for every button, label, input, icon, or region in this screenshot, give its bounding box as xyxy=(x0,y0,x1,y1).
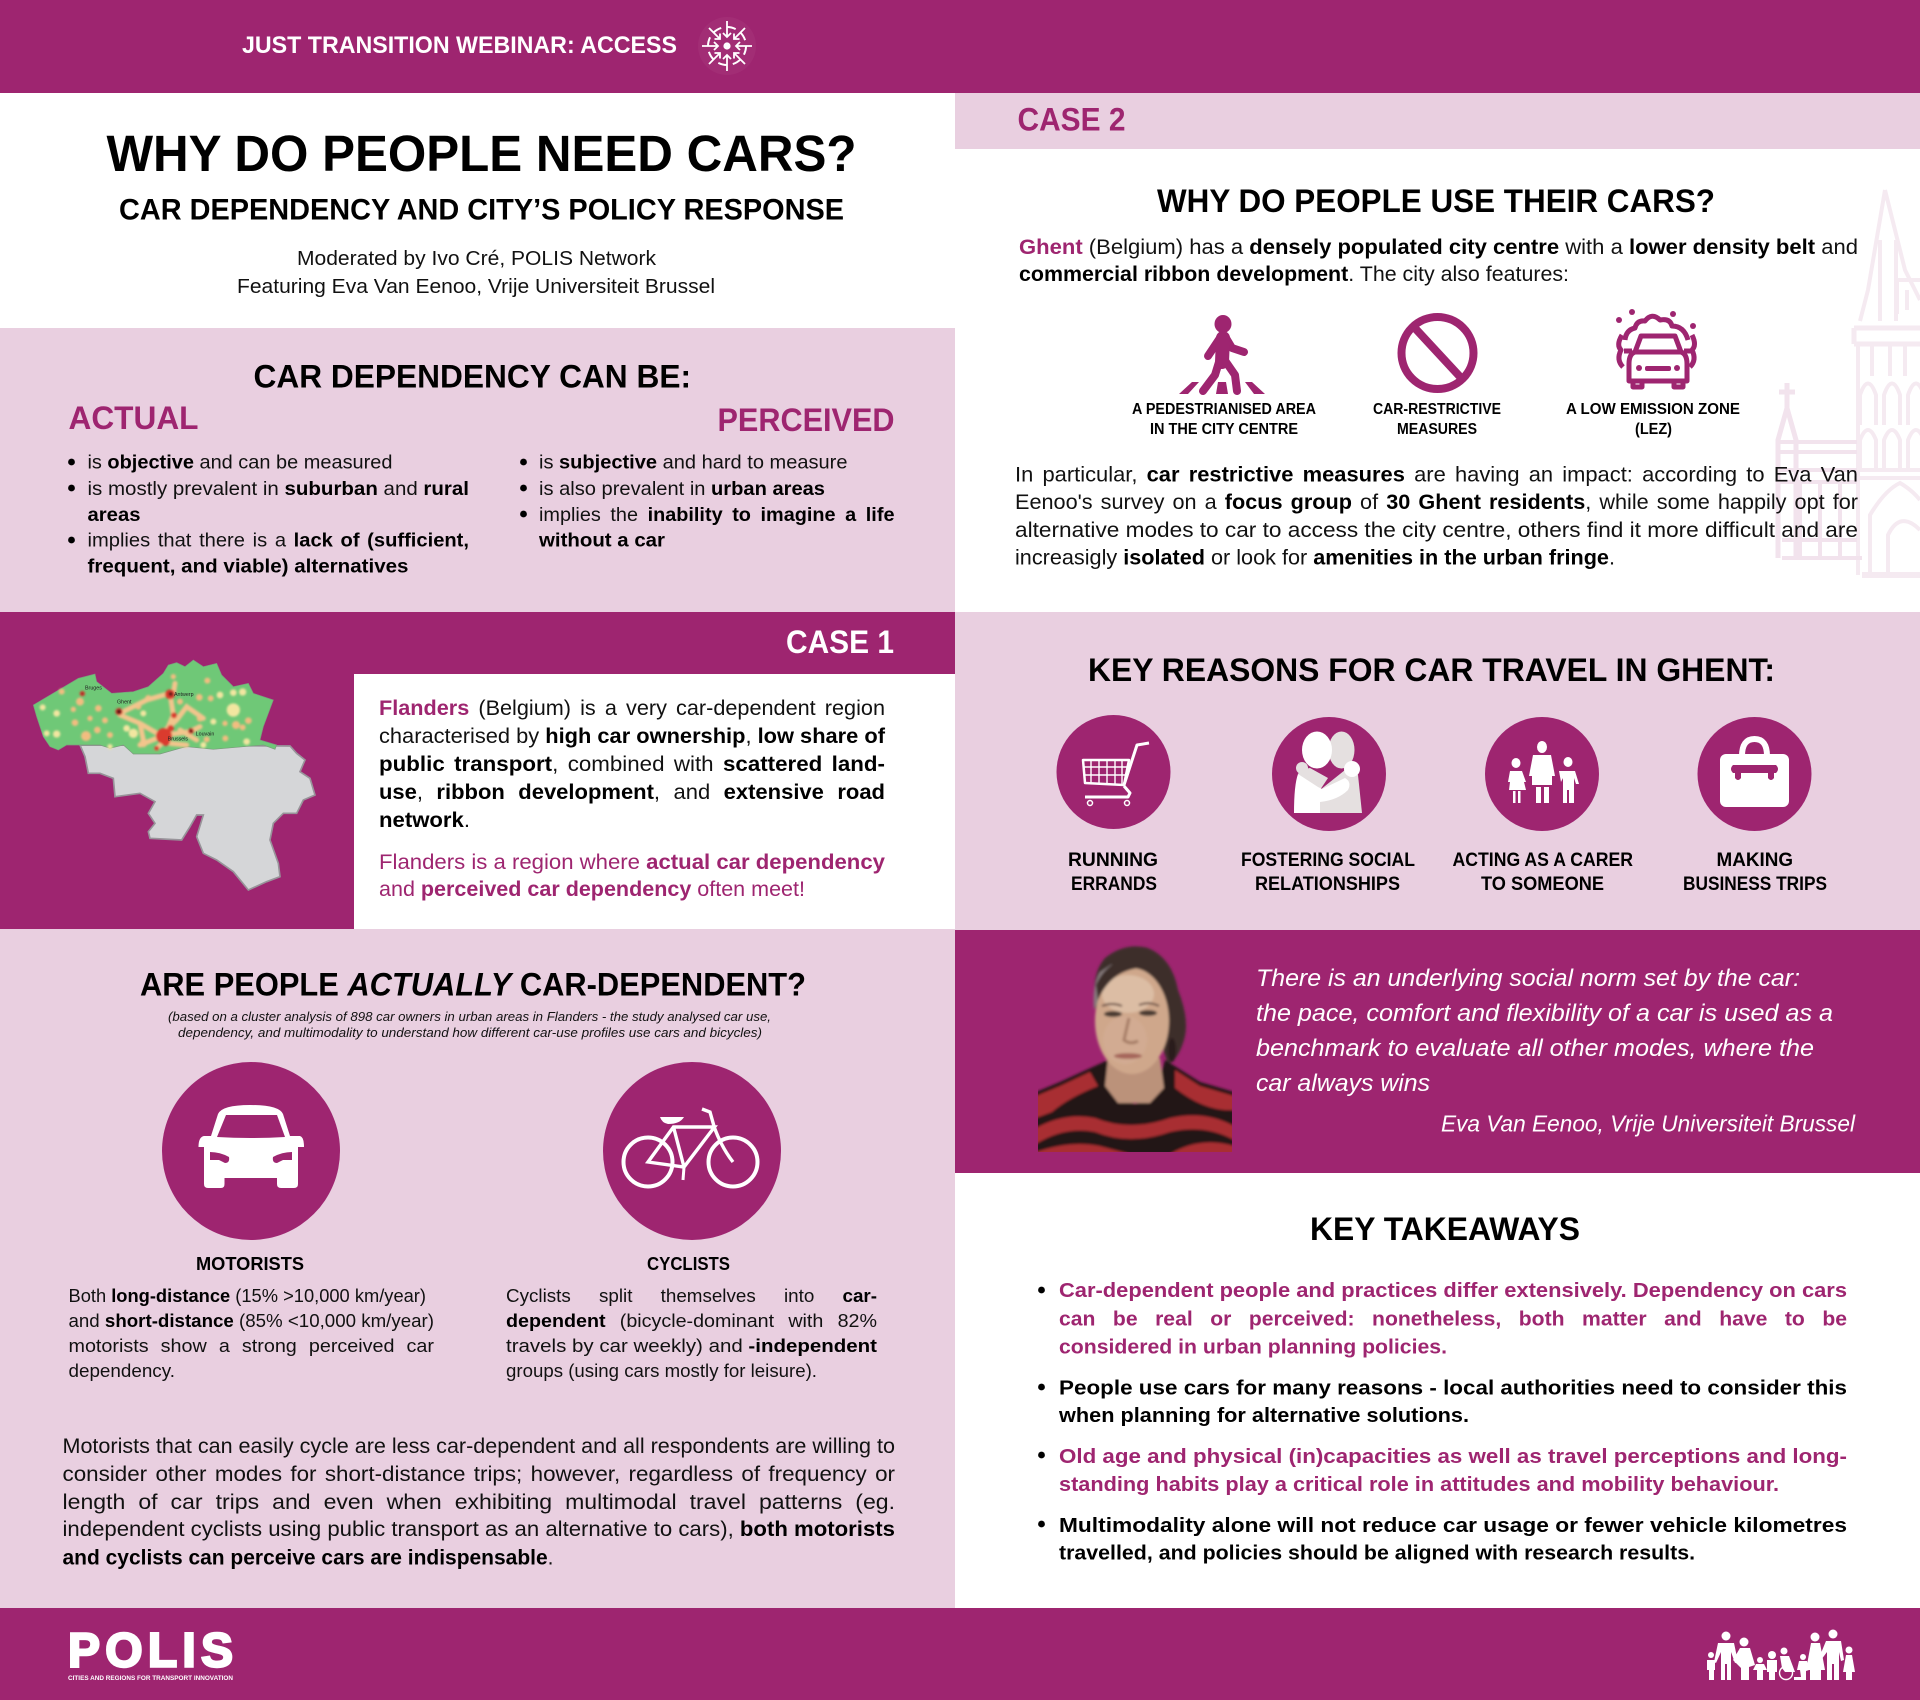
icon: low emission car xyxy=(1616,309,1696,387)
cyclists: Cyclists split themselves into car- xyxy=(506,1286,877,1306)
cyclists: travels by car weekly) and -independent xyxy=(506,1336,877,1356)
cyclists: dependent (bicycle-dominant with 82% xyxy=(506,1311,877,1331)
feature captions: A LOW EMISSION ZONE xyxy=(1566,401,1740,418)
icon: car in circle xyxy=(162,1062,340,1240)
Flanders highlight: Flanders is a region where actual car dependency xyxy=(379,851,885,874)
case 2 label: CASE 2 xyxy=(1018,102,1126,138)
conclusion paragraph xyxy=(62,1435,895,1570)
map of Belgium with Flanders heat map: Bruges xyxy=(85,685,102,691)
actual column: is mostly prevalent in suburban and rural xyxy=(88,478,469,500)
takeaway 3: Old age and physical (in)capacities as well as travel perceptions and long- xyxy=(1059,1446,1847,1468)
panel: car dependency types xyxy=(0,328,955,612)
motorists: Both long-distance (15% >10,000 km/year) xyxy=(68,1286,426,1306)
quote attribution: Eva Van Eenoo, Vrije Universiteit Brussel xyxy=(1441,1110,1856,1136)
conclusion paragraph: length of car trips and even when exhibiting multimodal travel patterns (eg. xyxy=(62,1491,895,1514)
reason captions: RUNNING xyxy=(1068,849,1158,871)
feature captions: MEASURES xyxy=(1397,421,1477,438)
cyclists: groups (using cars mostly for leisure). xyxy=(506,1361,817,1381)
perceived column: without a car xyxy=(538,530,665,552)
Flanders description: network. xyxy=(379,809,470,832)
icon: group of people xyxy=(1707,1630,1855,1680)
feature captions: A PEDESTRIANISED AREA xyxy=(1132,401,1316,418)
icon: no entry xyxy=(1402,317,1474,389)
map of Belgium with Flanders heat map: Ghent xyxy=(117,700,132,706)
cyclists: CYCLISTS xyxy=(647,1254,730,1274)
panel: quote xyxy=(955,930,1920,1173)
takeaway 2: People use cars for many reasons - local authorities need to consider this xyxy=(1059,1378,1847,1400)
cyclists xyxy=(506,1254,877,1381)
motorists: motorists show a strong perceived car xyxy=(68,1336,434,1356)
Flanders description: public transport , combined with scattered land- xyxy=(379,753,885,776)
takeaway 4: Multimodality alone will not reduce car usage or fewer vehicle kilometres xyxy=(1059,1515,1847,1537)
header title: JUST TRANSITION WEBINAR: ACCESS xyxy=(242,32,677,59)
perceived column: implies the inability to imagine a life xyxy=(539,504,895,526)
panel: key takeaways xyxy=(1038,1211,1847,1564)
reason captions: FOSTERING SOCIAL xyxy=(1241,849,1415,871)
actual column: ACTUAL xyxy=(68,400,198,436)
panel: case 2 Ghent xyxy=(955,93,1920,575)
panel: title block xyxy=(106,125,856,298)
footer banner xyxy=(0,1608,1920,1700)
heading: KEY REASONS FOR CAR TRAVEL IN GHENT: xyxy=(1088,652,1775,688)
heading: ARE PEOPLE ACTUALLY CAR-DEPENDENT? xyxy=(140,966,806,1002)
perceived column: is also prevalent in urban areas xyxy=(539,478,825,500)
quote text xyxy=(1256,965,1856,1136)
perceived column xyxy=(520,402,895,552)
perceived column: is subjective and hard to measure xyxy=(539,452,848,474)
header banner xyxy=(0,0,1920,93)
conclusion paragraph: and cyclists can perceive cars are indispensable. xyxy=(62,1546,554,1570)
actual column: frequent, and viable) alternatives xyxy=(88,556,409,578)
takeaway 1: can be real or perceived: nonetheless, both matter and have to be xyxy=(1059,1308,1847,1330)
POLIS logo: POLIS xyxy=(68,1624,233,1678)
panel: case 1 Flanders xyxy=(0,612,955,929)
map of Belgium with Flanders heat map: Louvain xyxy=(196,732,214,738)
motorists: MOTORISTS xyxy=(196,1254,304,1274)
Flanders highlight: and perceived car dependency often meet! xyxy=(379,878,805,901)
study note: (based on a cluster analysis of 898 car owners in urban areas in Flanders - the study analysed car use, xyxy=(168,1010,771,1024)
takeaway 1: considered in urban planning policies. xyxy=(1059,1336,1447,1358)
perceived column: PERCEIVED xyxy=(718,402,894,438)
icon: carer with children xyxy=(1485,717,1599,831)
subtitle: CAR DEPENDENCY AND CITY’S POLICY RESPONSE xyxy=(119,194,844,226)
map of Belgium with Flanders heat map: Brussels xyxy=(168,736,188,742)
icon: pedestrian crossing xyxy=(1179,315,1265,394)
Ghent intro: Ghent (Belgium) has a densely populated city centre with a lower density belt and xyxy=(1019,236,1858,259)
main title: WHY DO PEOPLE NEED CARS? xyxy=(106,125,856,182)
reason captions: ACTING AS A CARER xyxy=(1452,849,1633,871)
study note: dependency, and multimodality to understand how different car-use profiles use cars and bicycles) xyxy=(178,1026,762,1040)
feature captions: (LEZ) xyxy=(1635,421,1672,438)
conclusion paragraph: Motorists that can easily cycle are less car-dependent and all respondents are willing to xyxy=(62,1435,895,1458)
feature captions: CAR-RESTRICTIVE xyxy=(1373,401,1501,418)
car restrictive measures paragraph: increasigly isolated or look for amenities in the urban fringe . xyxy=(1015,546,1615,570)
takeaway 4 xyxy=(1038,1515,1847,1564)
actual column: implies that there is a lack of (sufficient, xyxy=(88,530,469,552)
quote text: There is an underlying social norm set by the car: xyxy=(1256,965,1800,992)
car restrictive measures paragraph xyxy=(1015,464,1858,570)
feature captions xyxy=(1132,401,1740,438)
church watermark xyxy=(1778,190,1920,575)
Flanders description xyxy=(379,697,886,832)
heading: KEY TAKEAWAYS xyxy=(1310,1211,1580,1247)
Ghent intro xyxy=(1019,236,1858,286)
speakers xyxy=(237,247,715,298)
panel: key reasons xyxy=(955,612,1920,930)
motorists: dependency. xyxy=(68,1361,175,1381)
motorists: and short-distance (85% <10,000 km/year) xyxy=(68,1311,434,1331)
takeaway 2: when planning for alternative solutions. xyxy=(1058,1405,1469,1427)
actual column: is objective and can be measured xyxy=(88,452,392,474)
heading: CAR DEPENDENCY CAN BE: xyxy=(254,358,691,394)
car restrictive measures paragraph: Eenoo's survey on a focus group of 30 Ghent residents , while some happily opt for xyxy=(1015,491,1858,514)
takeaway 1 xyxy=(1038,1280,1847,1358)
car restrictive measures paragraph: alternative modes to car to access the city centre, others find it more difficult and are xyxy=(1015,519,1858,542)
takeaway 2 xyxy=(1038,1378,1847,1427)
actual column xyxy=(68,400,469,578)
map of Belgium with Flanders heat map xyxy=(33,660,315,890)
feature captions: IN THE CITY CENTRE xyxy=(1150,421,1298,438)
conclusion paragraph: consider other modes for short-distance trips; however, regardless of frequency or xyxy=(62,1463,895,1486)
Ghent intro: commercial ribbon development . The city also features: xyxy=(1019,263,1569,286)
takeaway 1: Car-dependent people and practices differ extensively. Dependency on cars xyxy=(1059,1280,1847,1302)
reason captions: MAKING xyxy=(1716,849,1793,871)
takeaway 3 xyxy=(1038,1446,1847,1496)
quote text: the pace, comfort and flexibility of a car is used as a xyxy=(1256,1000,1833,1027)
conclusion paragraph: independent cyclists using public transport as an alternative to cars), both motorists xyxy=(62,1518,895,1541)
Flanders description: characterised by high car ownership , low share of xyxy=(379,725,886,748)
icon: access compass logo xyxy=(698,17,756,75)
study note xyxy=(168,1010,771,1040)
actual column: areas xyxy=(88,504,141,526)
Flanders description: Flanders (Belgium) is a very car-dependent region xyxy=(379,697,885,720)
speakers: Featuring Eva Van Eenoo, Vrije Universiteit Brussel xyxy=(237,275,715,298)
icon: two people hugging xyxy=(1272,717,1386,831)
heading: WHY DO PEOPLE USE THEIR CARS? xyxy=(1157,183,1715,219)
car restrictive measures paragraph: In particular, car restrictive measures are having an impact: according to Eva Van xyxy=(1015,464,1858,486)
reason captions: RELATIONSHIPS xyxy=(1255,873,1400,895)
motorists xyxy=(68,1254,434,1381)
reason captions: TO SOMEONE xyxy=(1481,873,1604,895)
portrait of Eva Van Eenoo xyxy=(1036,946,1234,1154)
quote text: benchmark to evaluate all other modes, where the xyxy=(1256,1035,1814,1062)
reason captions xyxy=(1068,849,1827,895)
Flanders description: use, ribbon development , and extensive road xyxy=(379,781,885,804)
speakers: Moderated by Ivo Cré, POLIS Network xyxy=(297,247,657,270)
POLIS logo: CITIES AND REGIONS FOR TRANSPORT INNOVATION xyxy=(68,1675,233,1682)
icon: business bag xyxy=(1698,717,1812,831)
quote text: car always wins xyxy=(1256,1070,1430,1097)
icon: bicycle in circle xyxy=(603,1062,781,1240)
reason captions: ERRANDS xyxy=(1071,873,1157,895)
panel: are people actually car-dependent xyxy=(0,929,955,1608)
map of Belgium with Flanders heat map: Antwerp xyxy=(174,692,194,698)
case 1 label: CASE 1 xyxy=(786,624,894,660)
reason captions: BUSINESS TRIPS xyxy=(1683,873,1827,895)
Flanders highlight xyxy=(379,851,885,901)
icon: shopping cart xyxy=(1056,715,1170,829)
takeaway 4: travelled, and policies should be aligned with research results. xyxy=(1059,1542,1695,1564)
takeaway 3: standing habits play a critical role in attitudes and mobility behaviour. xyxy=(1059,1474,1779,1496)
